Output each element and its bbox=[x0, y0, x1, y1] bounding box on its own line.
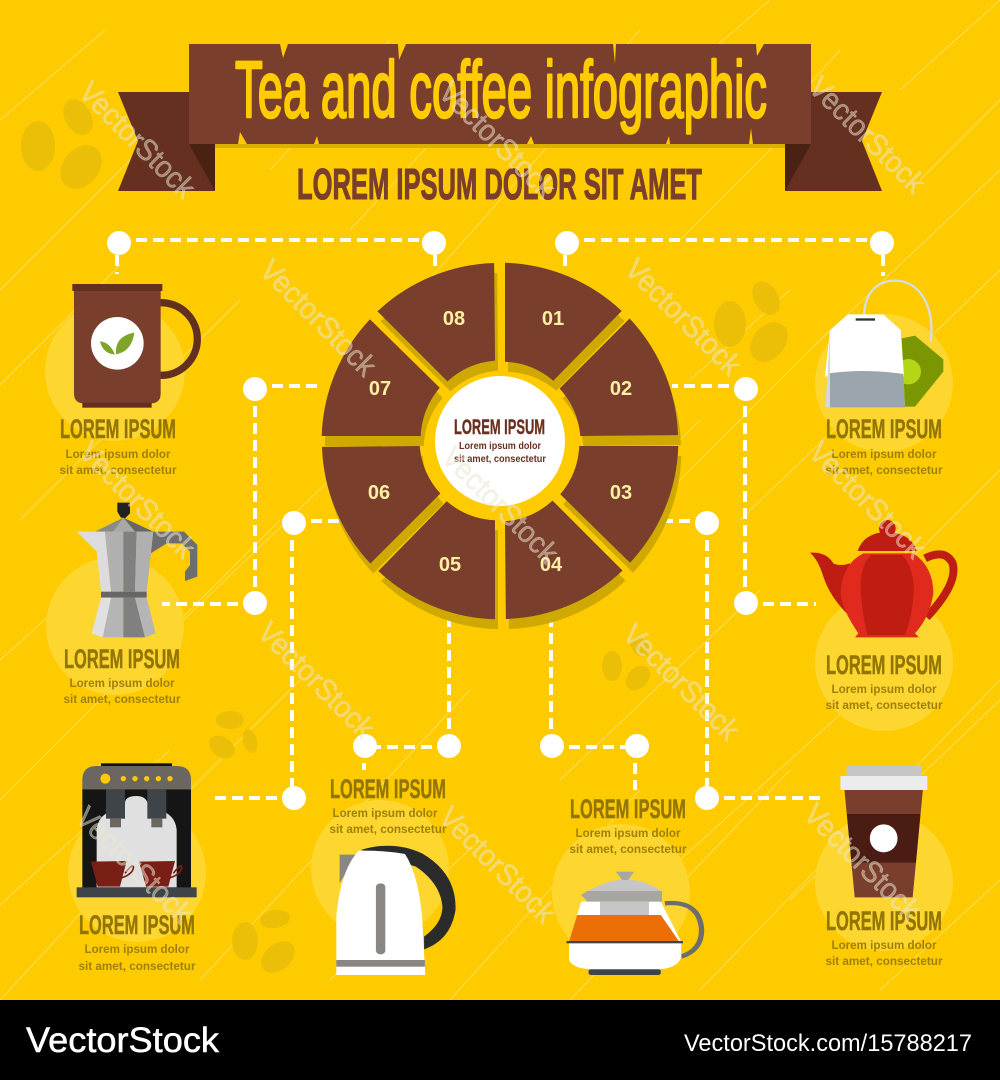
label: moka pot: LOREM IPSUM bbox=[64, 644, 180, 674]
donut center bbox=[432, 373, 568, 509]
label: moka pot bbox=[64, 644, 181, 706]
label: red teapot bbox=[826, 650, 943, 712]
footer bar: VectorStock bbox=[26, 1021, 220, 1060]
label: kettle: Lorem ipsum dolor bbox=[332, 808, 438, 820]
segment numbers: 04 bbox=[540, 554, 563, 576]
label: mug: LOREM IPSUM bbox=[60, 414, 176, 444]
icon: electric kettle bbox=[336, 846, 456, 975]
segment numbers: 03 bbox=[610, 482, 632, 504]
segment numbers: 08 bbox=[443, 308, 465, 330]
segment numbers: 05 bbox=[439, 554, 461, 576]
donut chart bbox=[288, 229, 715, 663]
label: coffee machine: sit amet, consectetur bbox=[78, 961, 196, 973]
label: kettle: sit amet, consectetur bbox=[330, 824, 447, 836]
watermarks: VectorStock bbox=[802, 71, 932, 201]
watermarks: VectorStock bbox=[253, 254, 383, 384]
label: mug bbox=[60, 414, 177, 477]
watermarks bbox=[69, 71, 932, 931]
donut center: sit amet, consectetur bbox=[454, 453, 546, 465]
label: coffee machine bbox=[78, 910, 196, 973]
icon: tea mug bbox=[72, 284, 197, 408]
connector nodes bbox=[107, 231, 894, 810]
segment numbers: 02 bbox=[610, 378, 632, 400]
watermarks: VectorStock bbox=[435, 441, 565, 571]
watermarks: VectorStock bbox=[616, 618, 746, 748]
label: moka pot: sit amet, consectetur bbox=[64, 694, 181, 706]
label: red teapot: Lorem ipsum dolor bbox=[832, 684, 937, 696]
segment numbers: 06 bbox=[368, 482, 390, 504]
icon: takeaway coffee cup bbox=[840, 766, 927, 897]
label: glass teapot: sit amet, consectetur bbox=[570, 844, 687, 856]
label: glass teapot: Lorem ipsum dolor bbox=[576, 828, 681, 840]
label: mug: Lorem ipsum dolor bbox=[66, 449, 171, 461]
dashed connectors bbox=[117, 240, 883, 798]
label: takeaway cup: sit amet, consectetur bbox=[826, 956, 943, 968]
icon: tea bag bbox=[825, 281, 943, 407]
subtitle: LOREM IPSUM DOLOR SIT AMET bbox=[297, 160, 702, 209]
watermarks: VectorStock bbox=[72, 436, 202, 566]
label: red teapot: sit amet, consectetur bbox=[826, 700, 943, 712]
decorative halo circles bbox=[45, 301, 953, 962]
watermarks: VectorStock bbox=[797, 798, 927, 928]
donut center: LOREM IPSUM bbox=[454, 416, 545, 439]
watermarks: VectorStock bbox=[432, 76, 562, 206]
label: takeaway cup bbox=[826, 906, 943, 968]
icon: coffee beans top right bbox=[714, 276, 795, 369]
label: glass teapot: LOREM IPSUM bbox=[570, 794, 686, 824]
icon: coffee beans center bottom bbox=[602, 633, 655, 695]
icon: red teapot bbox=[810, 520, 954, 637]
footer bar bbox=[0, 1000, 1000, 1080]
icon: coffee beans lower left bbox=[205, 711, 260, 763]
donut center: Lorem ipsum dolor bbox=[459, 440, 541, 452]
icon: glass teapot bbox=[567, 872, 702, 975]
watermarks: VectorStock bbox=[251, 616, 381, 746]
segment numbers: 01 bbox=[542, 308, 564, 330]
watermarks: VectorStock bbox=[432, 801, 562, 931]
label: coffee machine: Lorem ipsum dolor bbox=[84, 944, 190, 956]
label: kettle bbox=[330, 774, 447, 836]
label: tea bag: Lorem ipsum dolor bbox=[832, 449, 937, 461]
watermarks: VectorStock bbox=[802, 436, 932, 566]
label: glass teapot bbox=[570, 794, 687, 856]
label: takeaway cup: Lorem ipsum dolor bbox=[832, 940, 937, 952]
watermarks: VectorStock bbox=[69, 801, 199, 931]
label: tea bag: sit amet, consectetur bbox=[826, 465, 943, 477]
label: coffee machine: LOREM IPSUM bbox=[79, 910, 195, 940]
icon: coffee beans top left bbox=[21, 94, 110, 197]
segment numbers bbox=[368, 308, 632, 576]
label: mug: sit amet, consectetur bbox=[60, 465, 177, 477]
segment numbers: 07 bbox=[369, 378, 391, 400]
label: tea bag bbox=[826, 414, 943, 477]
icon: moka pot bbox=[77, 503, 197, 637]
footer bar: VectorStock.com/15788217 bbox=[684, 1030, 972, 1057]
watermarks: VectorStock bbox=[72, 76, 202, 206]
icon: coffee beans bottom bbox=[232, 908, 301, 979]
icon: coffee machine bbox=[77, 763, 197, 897]
watermarks: VectorStock bbox=[618, 253, 748, 383]
label: moka pot: Lorem ipsum dolor bbox=[70, 678, 175, 690]
label: kettle: LOREM IPSUM bbox=[330, 774, 446, 804]
title ribbon bbox=[118, 44, 882, 191]
